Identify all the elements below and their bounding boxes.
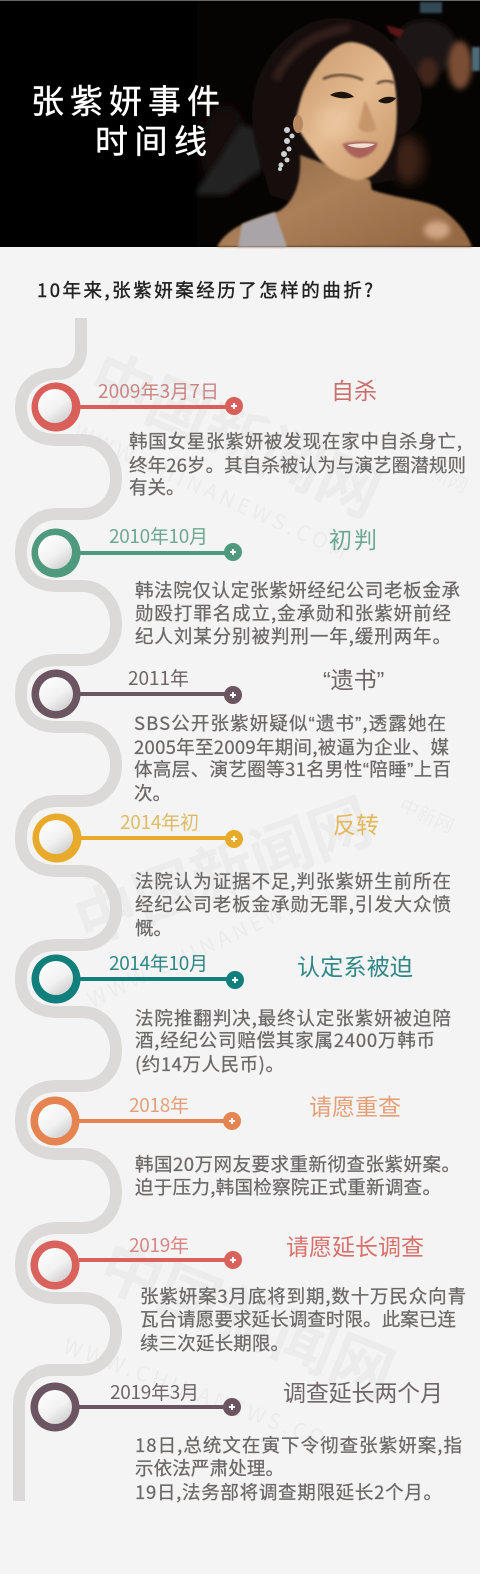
node 2011 <box>32 670 242 718</box>
body 2019 March: 18日,总统文在寅下令彻查张紫妍案,指 <box>135 1432 462 1458</box>
eyes and brows <box>323 75 363 80</box>
heading 请愿重查: 请愿重查 <box>309 1088 401 1122</box>
watermarks: 中国新闻网 <box>88 1215 409 1415</box>
title <box>31 75 220 163</box>
event: 2009 <box>32 372 466 500</box>
node 2019 <box>30 1240 242 1290</box>
node 2018 <box>30 1096 241 1146</box>
body 2009: 终年26岁。其自杀被认为与演艺圈潜规则 <box>129 452 466 478</box>
winding timeline path <box>19 318 116 1501</box>
body 2009: 有关。 <box>129 474 184 500</box>
node 2010 <box>32 528 242 578</box>
heading 认定系被迫: 认定系被迫 <box>297 948 413 982</box>
body 2009: 韩国女星张紫妍被发现在家中自杀身亡, <box>129 428 462 454</box>
body 2018: 迫于压力,韩国检察院正式重新调查。 <box>135 1174 441 1200</box>
body 2014 October: 法院推翻判决,最终认定张紫妍被迫陪 <box>135 1005 451 1031</box>
body 2014 early: 法院认为证据不足,判张紫妍生前所在 <box>135 868 451 894</box>
event: 2014 early <box>32 806 451 941</box>
body 2014 early: 经纪公司老板金承勋无罪,引发大众愤 <box>135 891 451 917</box>
body 2014 October: (约14万人民币)。 <box>135 1051 284 1077</box>
heading 调查延长两个月: 调查延长两个月 <box>283 1374 443 1408</box>
earring <box>278 127 294 171</box>
body 2019 March: 示依法严肃处理。 <box>135 1455 284 1481</box>
title: 张紫妍事件 <box>31 75 220 123</box>
node 2014 early <box>32 814 243 862</box>
header banner with photo <box>0 0 480 247</box>
event: 2019 March <box>30 1374 462 1505</box>
body 2014 October <box>135 1005 451 1077</box>
body 2019: 瓦台请愿要求延长调查时限。此案已连 <box>140 1306 456 1332</box>
watermarks <box>60 326 473 1461</box>
subtitle: 10年来,张紫妍案经历了怎样的曲折? <box>37 277 373 303</box>
body 2011: SBS公开张紫妍疑似“遗书”,透露她在 <box>134 710 446 736</box>
body 2018 <box>135 1151 460 1200</box>
event: 2018 <box>30 1088 460 1200</box>
heading 遗书: “遗书” <box>323 661 384 695</box>
event: 2010 <box>32 521 460 649</box>
node 2019 March <box>30 1382 241 1432</box>
body 2009 <box>129 428 466 500</box>
heading 请愿延长调查: 请愿延长调查 <box>286 1228 424 1262</box>
body 2019 <box>140 1283 466 1356</box>
watermarks: WWW.CHINANEWS.COM <box>82 860 367 1014</box>
date 2018: 2018年 <box>129 1091 189 1118</box>
body 2019 March <box>135 1432 462 1505</box>
hair <box>252 18 422 205</box>
body 2014 October: 酒,经纪公司赔偿其家属2400万韩币 <box>135 1027 435 1053</box>
watermarks: WWW.CHINANEWS.COM <box>60 1330 352 1461</box>
dress <box>238 212 287 247</box>
event: 2014 October <box>32 948 451 1077</box>
date 2010: 2010年10月 <box>109 522 208 549</box>
body 2014 early <box>135 868 451 941</box>
face <box>295 42 397 180</box>
body 2011 <box>134 710 451 806</box>
body 2018: 韩国20万网友要求重新彻查张紫妍案。 <box>135 1151 460 1177</box>
body 2014 early: 慨。 <box>135 915 172 941</box>
lips <box>342 142 378 158</box>
date 2009: 2009年3月7日 <box>98 377 219 404</box>
body 2019: 张紫妍案3月底将到期,数十万民众向青 <box>140 1283 466 1309</box>
date 2019 March: 2019年3月 <box>110 1378 199 1405</box>
body 2019: 续三次延长期限。 <box>140 1330 289 1356</box>
watermarks: 中国新闻网 <box>60 771 382 962</box>
event: 2019 <box>30 1228 466 1356</box>
body 2011: 体高层、演艺圈等31名男性“陪睡”上百 <box>134 756 451 782</box>
neck and shoulder <box>217 155 472 247</box>
heading 初判: 初判 <box>329 521 377 555</box>
body 2010 <box>135 577 460 649</box>
body 2019 March: 19日,法务部将调查期限延长2个月。 <box>135 1479 442 1505</box>
date 2014 early: 2014年初 <box>120 808 199 835</box>
date 2019: 2019年 <box>129 1231 189 1258</box>
heading 自杀: 自杀 <box>331 372 377 406</box>
node 2009 <box>32 382 243 432</box>
date 2011: 2011年 <box>128 664 189 691</box>
body 2010: 韩法院仅认定张紫妍经纪公司老板金承 <box>135 577 460 603</box>
date 2014 October: 2014年10月 <box>109 949 208 976</box>
body 2011: 次。 <box>134 780 171 806</box>
body 2011: 2005年至2009年期间,被逼为企业、媒 <box>134 734 449 760</box>
heading 反转: 反转 <box>333 806 379 840</box>
watermarks: 中新网 <box>396 791 459 839</box>
event: 2011 <box>32 661 451 806</box>
body 2010: 勋殴打罪名成立,金承勋和张紫妍前经 <box>135 600 451 626</box>
title: 时间线 <box>95 115 207 163</box>
node 2014 October <box>32 954 244 1004</box>
body 2010: 纪人刘某分别被判刑一年,缓刑两年。 <box>135 623 451 649</box>
watermarks: 中新网 <box>410 451 473 499</box>
watermarks: 中国新闻网 <box>78 326 397 535</box>
watermarks: WWW.CHINANEWS.COM <box>69 417 356 567</box>
